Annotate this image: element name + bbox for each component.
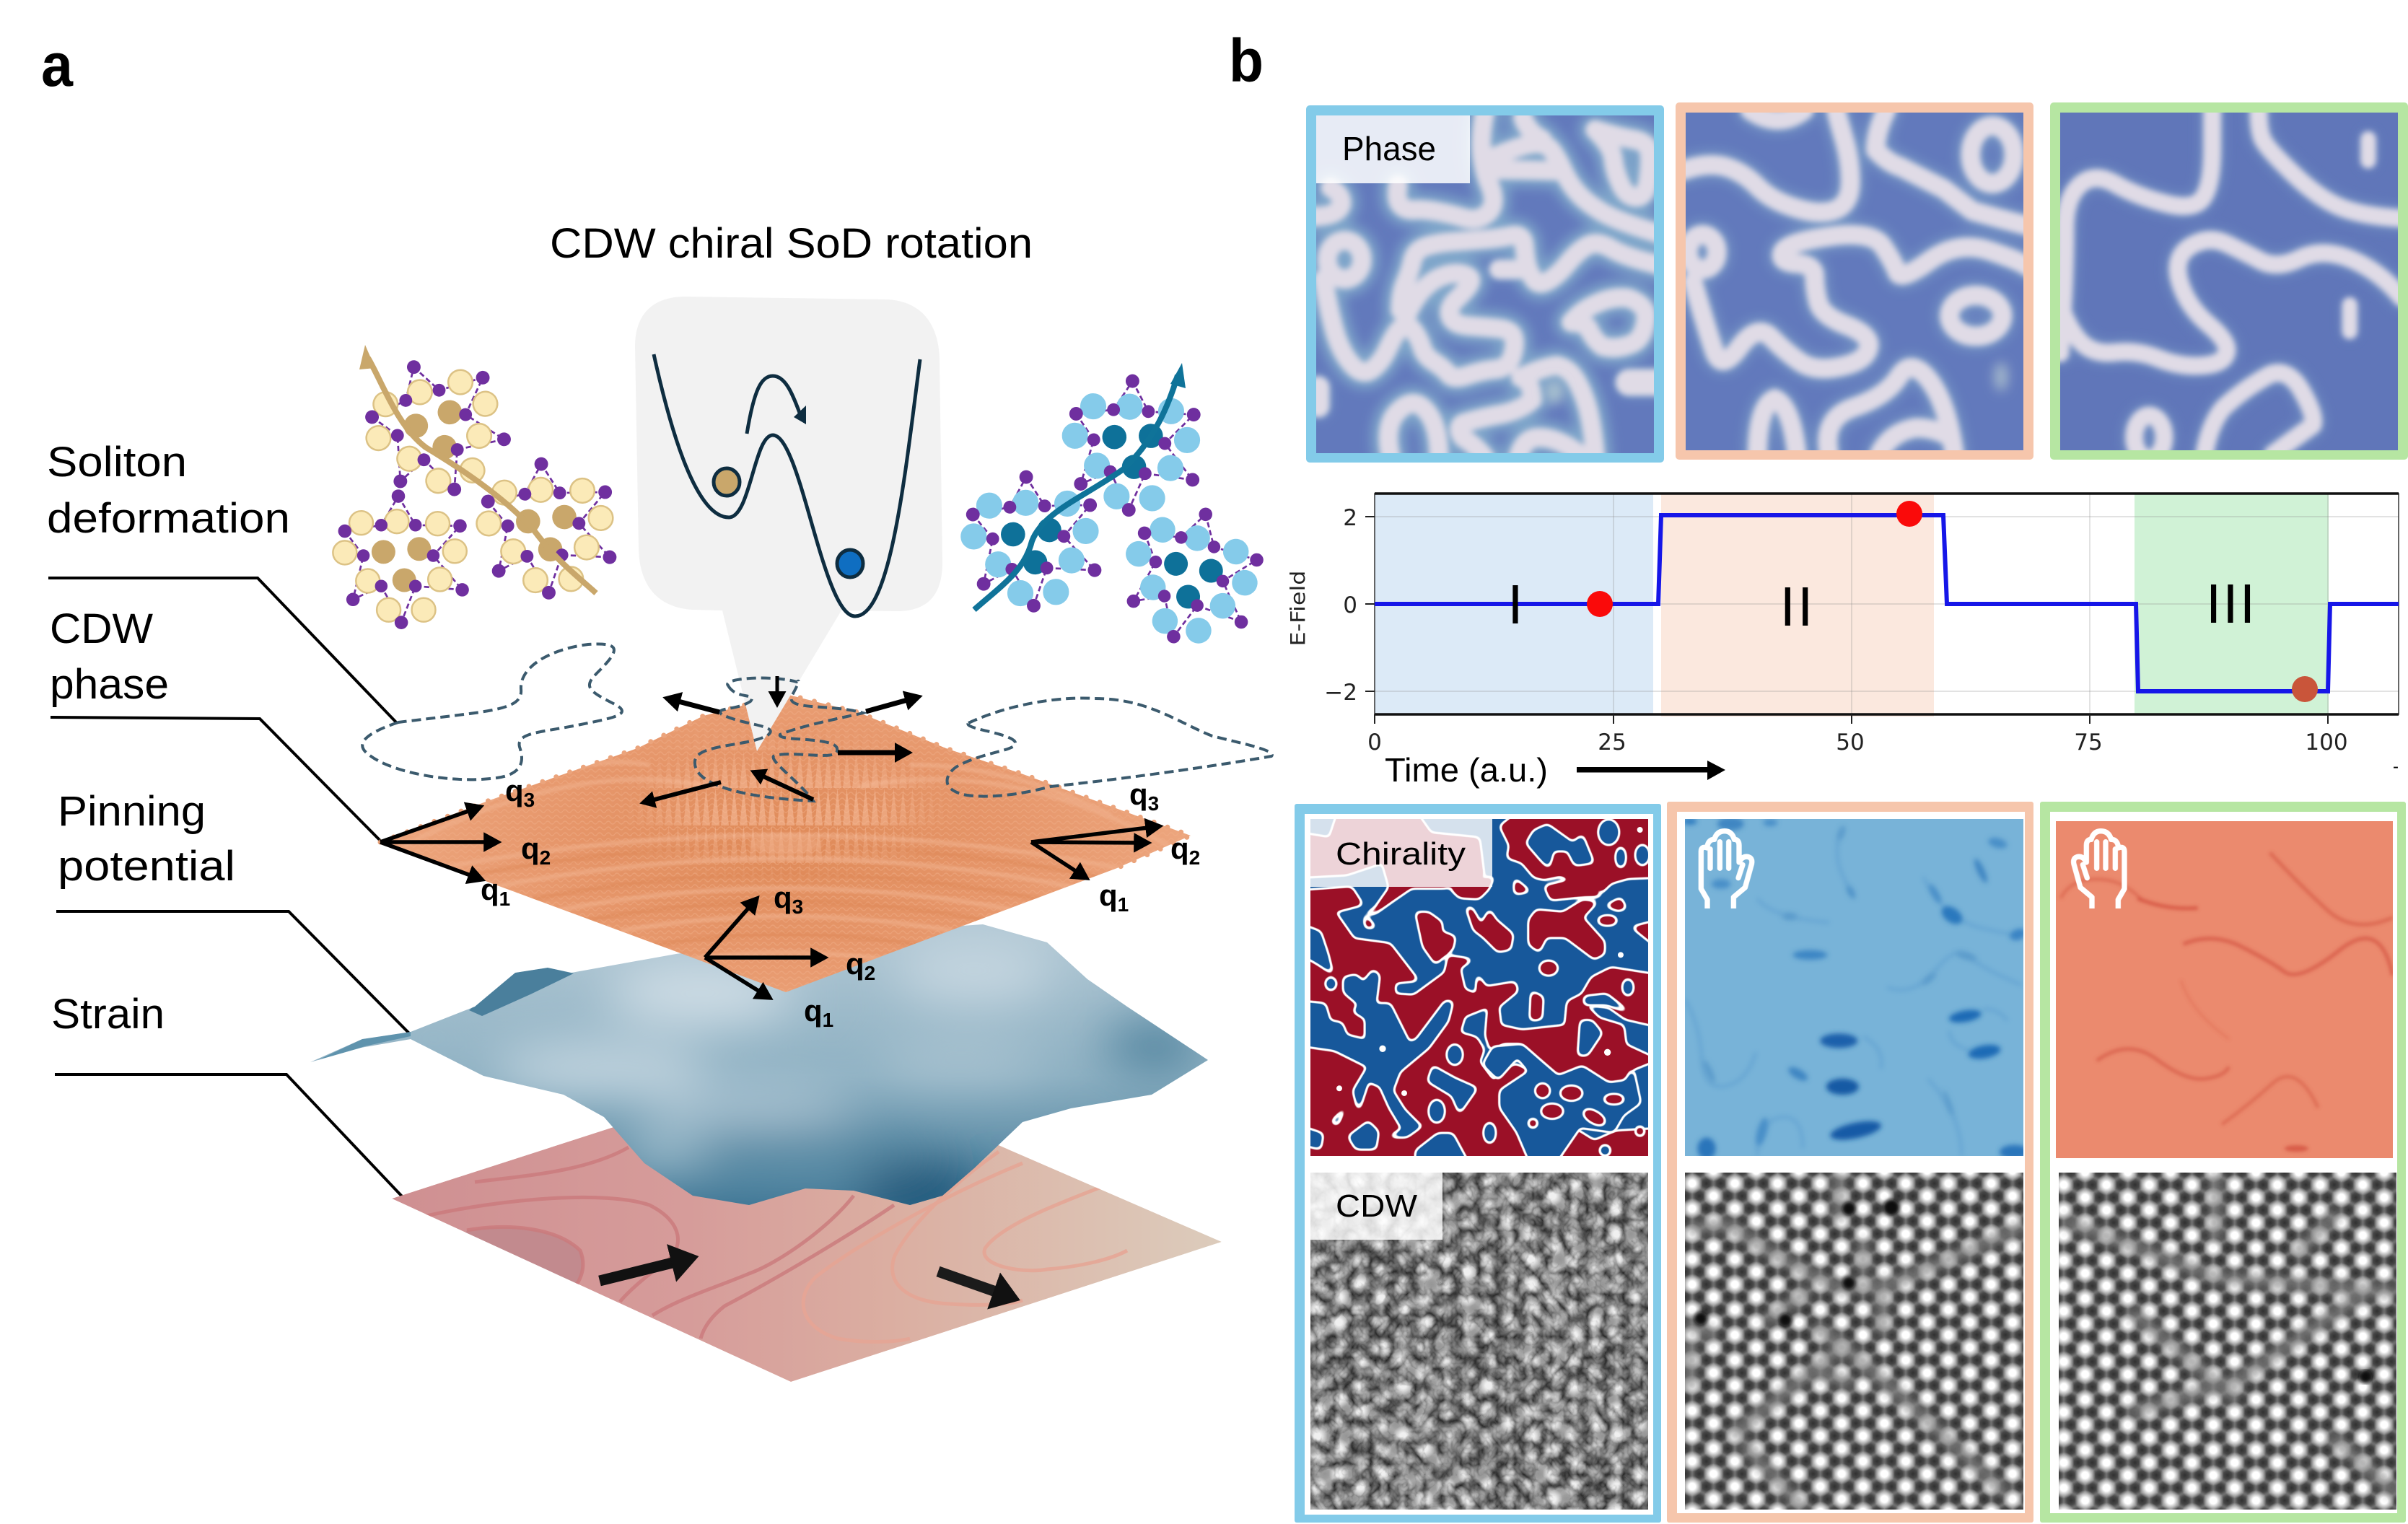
vectors: q triad right corner: 3 — [1148, 792, 1159, 815]
y axis tick labels: 0 — [1343, 592, 1357, 618]
vectors: q triad bottom corner: q — [774, 880, 792, 914]
band: region III — [2135, 494, 2329, 714]
vectors: q triad left corner — [380, 774, 551, 910]
vectors: q triad left corner: 1 — [499, 888, 510, 910]
band: region I — [1375, 494, 1653, 714]
chart: E-field vs time: - — [2393, 757, 2399, 776]
icon: left-handed SoD clusters — [333, 339, 618, 629]
frame: chirality and CDW column I — [1295, 804, 1661, 1523]
arrow: time direction — [1577, 761, 1725, 780]
label: Chirality: Chirality — [1336, 836, 1466, 872]
vectors: q triad bottom corner: 1 — [823, 1009, 833, 1031]
vectors: q triad bottom corner: 3 — [792, 895, 803, 918]
marker: time point I — [1587, 591, 1613, 617]
frame: chirality and CDW column III — [2040, 802, 2406, 1523]
y axis tick labels: −2 — [1324, 680, 1357, 706]
y axis title: E-Field: E-Field — [1286, 570, 1310, 647]
frame: chirality and CDW column II — [1667, 802, 2033, 1523]
label: CDW — [1310, 1173, 1442, 1240]
vectors: q triad bottom corner: 2 — [864, 962, 875, 984]
label: CDW phase: phase — [50, 661, 169, 708]
vectors: q triad left corner: q — [481, 872, 499, 906]
vectors: q triad bottom corner: q — [846, 947, 864, 981]
x axis tick labels: 50 — [1836, 730, 1865, 756]
image: phase map I — [1314, 113, 1658, 457]
panel b — [1286, 102, 2408, 1523]
vectors: q triad left corner: q — [505, 774, 524, 807]
label: Chirality — [1310, 819, 1492, 887]
image: phase map III — [2060, 110, 2402, 459]
region numerals: I — [1507, 574, 1523, 636]
heading: CDW chiral SoD rotation: CDW chiral SoD rotation — [550, 220, 1033, 267]
label: CDW phase: CDW — [50, 605, 153, 652]
label: Pinning potential — [58, 788, 235, 890]
band: region II — [1661, 494, 1934, 717]
arrow: strain direction left — [600, 1260, 684, 1281]
vectors: q triad left corner: q — [521, 831, 540, 865]
image: CDW lattice II — [1685, 1173, 2023, 1510]
marker: time point III — [2292, 676, 2318, 702]
y axis tick labels — [1324, 505, 1357, 706]
vectors: q triad right corner: 2 — [1189, 846, 1200, 869]
x axis tick labels: 75 — [2074, 730, 2103, 756]
image: chirality map II — [1683, 817, 2029, 1160]
vectors: q triad left corner: 2 — [540, 846, 551, 869]
vectors: q triad bottom corner — [705, 880, 875, 1031]
image: phase map II — [1684, 110, 2027, 454]
frame: phase III — [2050, 102, 2408, 460]
chart: E-field vs time — [1286, 494, 2399, 789]
vectors: q triad left corner: 3 — [524, 789, 535, 811]
callout: double-well bubble — [635, 297, 942, 751]
image: chirality map III — [2056, 821, 2393, 1158]
region numerals — [1507, 573, 2256, 638]
frame: phase II — [1676, 102, 2033, 460]
vectors: q triad right corner: 1 — [1118, 893, 1129, 916]
marker: right-well ball — [837, 550, 863, 577]
region numerals: II — [1780, 576, 1815, 638]
vectors: q triad right corner: q — [1170, 831, 1189, 865]
chart: double-well energy curve — [654, 354, 920, 616]
arrow: barrier crossing — [747, 376, 806, 434]
layer: pinning potential surface — [303, 916, 1220, 1217]
x axis tick labels: 25 — [1598, 730, 1627, 756]
vectors: q triad right corner: q — [1099, 878, 1118, 912]
arrows: chirality motion around soliton — [644, 676, 918, 802]
vectors: q triad right corner: q — [1129, 777, 1148, 811]
label: CDW phase — [50, 605, 169, 708]
x axis tick labels — [1367, 730, 2348, 756]
vectors: q triad bottom corner: q — [804, 994, 823, 1028]
panel a: layered stack diagram — [47, 220, 1275, 1382]
label: Soliton deformation: Soliton — [47, 439, 187, 486]
label: Pinning potential: potential — [58, 843, 235, 890]
x axis tick labels: 0 — [1367, 730, 1382, 756]
x axis title: Time (a.u.): Time (a.u.) — [1385, 751, 1548, 789]
layer: CDW phase surface — [375, 686, 1198, 996]
y axis tick labels: 2 — [1343, 505, 1357, 531]
image: CDW lattice I — [1310, 1173, 1648, 1510]
leader lines — [48, 578, 415, 1199]
icon: hand II — [1701, 831, 1752, 908]
icon: right-handed SoD clusters — [959, 363, 1275, 662]
label: Pinning potential: Pinning — [58, 788, 206, 835]
label: Soliton deformation — [47, 439, 290, 542]
image: chirality map I — [1310, 819, 1648, 1156]
signal line — [1375, 515, 2399, 691]
soliton dashed outlines — [362, 644, 1272, 801]
frame: phase I — [1306, 105, 1664, 463]
region numerals: III — [2206, 573, 2256, 635]
vectors: q triad right corner — [1031, 777, 1200, 916]
panel label: a: a — [41, 31, 74, 99]
arrow: strain direction right — [938, 1271, 1006, 1295]
image: CDW lattice III — [2059, 1173, 2396, 1510]
label: CDW: CDW — [1336, 1188, 1417, 1224]
label: Phase — [1316, 115, 1470, 183]
layer: strain plane with contours — [393, 1127, 1221, 1382]
x axis tick labels: 100 — [2305, 730, 2348, 756]
marker: left-well ball — [714, 468, 740, 496]
icon: hand III — [2074, 831, 2124, 908]
marker: time point II — [1896, 501, 1922, 527]
label: Soliton deformation: deformation — [47, 495, 290, 542]
panel label: b: b — [1229, 27, 1264, 95]
label: Strain: Strain — [51, 991, 165, 1038]
label: Phase: Phase — [1342, 130, 1436, 167]
